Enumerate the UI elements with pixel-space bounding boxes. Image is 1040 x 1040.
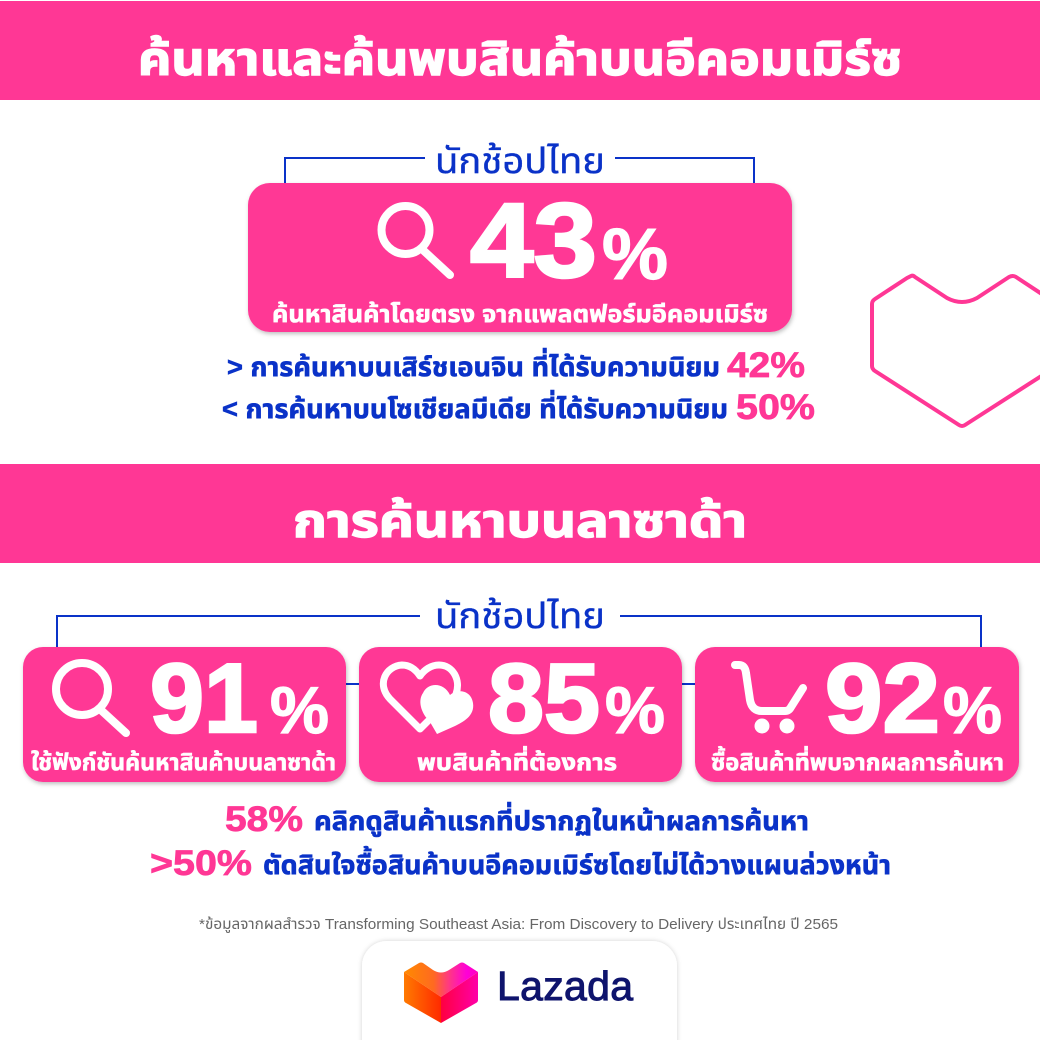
caption: ค้นหาสินค้าโดยตรง จากแพลตฟอร์มอีคอมเมิร์ซ xyxy=(272,300,768,328)
icon: Lazada heart xyxy=(404,962,478,1023)
number: 92: 92 xyxy=(825,643,940,753)
percent sign: % xyxy=(602,215,668,295)
stat line: more than 50% xyxy=(150,844,891,883)
number: 85: 85 xyxy=(488,643,600,753)
label: Thai shoppers: นักช้อปไทย xyxy=(435,140,605,181)
decorative heart outline xyxy=(872,276,1040,426)
comparison: search engine xyxy=(227,346,805,385)
panel: 43% stat xyxy=(248,182,792,332)
header band: search and discovery xyxy=(0,1,1040,100)
icon: magnifier xyxy=(56,663,126,733)
stat line: 58% xyxy=(225,800,809,839)
logo card xyxy=(362,941,677,1040)
panel: 92% stat xyxy=(695,643,1019,782)
title: section one: ค้นหาและค้นพบสินค้าบนอีคอมเมิร์ซ xyxy=(138,33,902,85)
value: 42%: 42% xyxy=(727,346,805,385)
label: Thai shoppers: นักช้อปไทย xyxy=(435,595,605,636)
percent sign: % xyxy=(270,673,329,747)
icon: magnifier xyxy=(382,206,450,275)
bracket: Thai shoppers section two xyxy=(57,595,981,647)
comparison: search engine: > การค้นหาบนเสิร์ชเอนจิน ที่ได้รับความนิยม xyxy=(227,348,720,382)
description: ตัดสินใจซื้อสินค้าบนอีคอมเมิร์ซโดยไม่ได้วางแผนล่วงหน้า xyxy=(263,846,891,880)
description: คลิกดูสินค้าแรกที่ปรากฏในหน้าผลการค้นหา xyxy=(314,802,809,837)
caption: ใช้ฟังก์ชันค้นหาสินค้าบนลาซาด้า xyxy=(31,749,336,775)
value: 50%: 50% xyxy=(736,388,815,427)
stat line: more than 50%: >50% xyxy=(150,844,252,883)
icon: shopping cart xyxy=(735,665,803,734)
comparison: social media: < การค้นหาบนโซเชียลมีเดีย ที่ได้รับความนิยม xyxy=(222,390,728,424)
panel: 85% stat xyxy=(359,643,682,782)
number: 43: 43 xyxy=(470,182,597,300)
icon: two hearts xyxy=(383,665,473,734)
stat line: 58%: 58% xyxy=(225,800,303,839)
percent sign: % xyxy=(605,673,665,747)
footnote: *ข้อมูลจากผลสำรวจ Transforming Southeast Asia: From Discovery to Delivery ประเทศไทย ปี 2565 xyxy=(199,916,838,933)
percent sign: % xyxy=(943,673,1002,747)
caption: พบสินค้าที่ต้องการ xyxy=(417,746,617,775)
comparison: social media xyxy=(222,388,815,427)
title: section two: การค้นหาบนลาซาด้า xyxy=(293,495,747,547)
panel: 91% stat xyxy=(23,643,346,782)
header band: search on Lazada xyxy=(0,464,1040,563)
wordmark: Lazada xyxy=(497,963,633,1009)
bracket: Thai shoppers section one xyxy=(285,140,754,183)
caption: ซื้อสินค้าที่พบจากผลการค้นหา xyxy=(711,746,1004,775)
number: 91: 91 xyxy=(150,643,258,753)
connector between cards xyxy=(346,683,695,685)
